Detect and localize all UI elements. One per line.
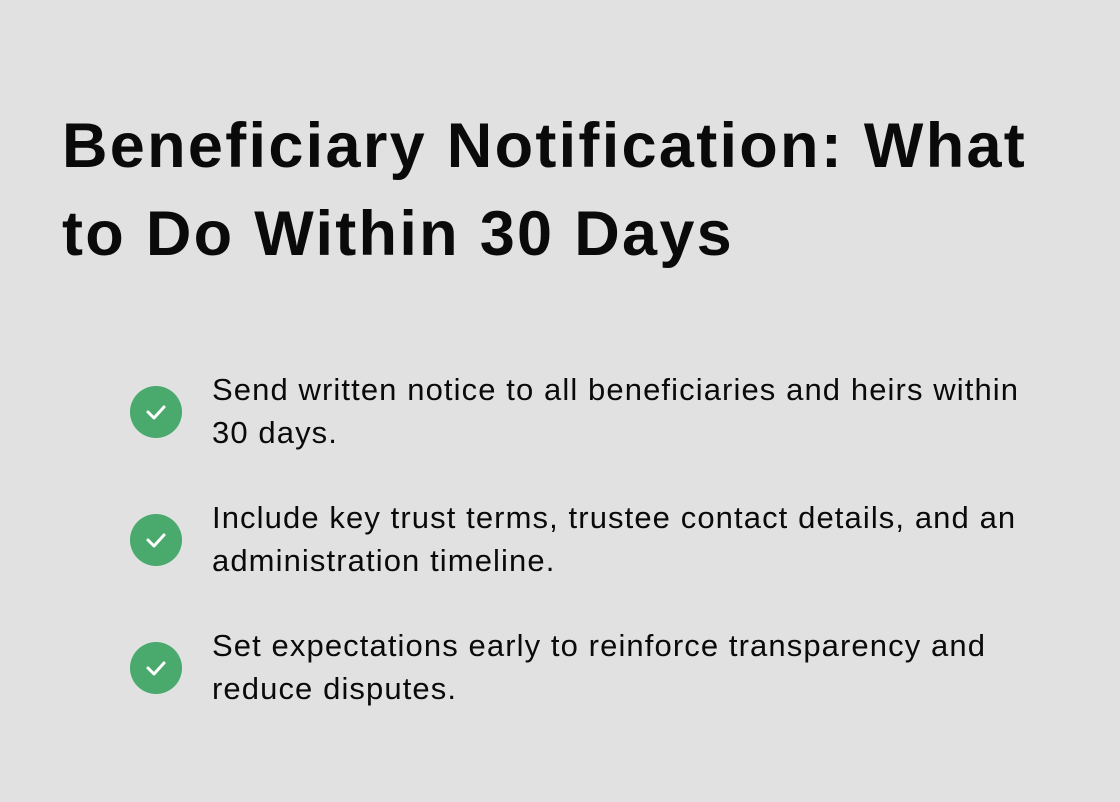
- title: Beneficiary Notification: What: [62, 111, 1027, 181]
- title: to Do Within 30 Days: [62, 199, 734, 269]
- icon: check 2: [130, 514, 182, 566]
- icon: check 3: [130, 642, 182, 694]
- text 3: reduce disputes.: [212, 671, 457, 706]
- icon: check 1: [130, 386, 182, 438]
- text 2: Include key trust terms, trustee contact details, and an: [212, 500, 1016, 535]
- item 1: [130, 372, 1019, 450]
- text 2: [212, 500, 1016, 578]
- item 3: [130, 628, 986, 706]
- text 1: 30 days.: [212, 415, 338, 450]
- text 1: [212, 372, 1019, 450]
- text 1: Send written notice to all beneficiaries and heirs within: [212, 372, 1019, 407]
- text 3: [212, 628, 986, 706]
- title: [62, 111, 1027, 269]
- text 3: Set expectations early to reinforce transparency and: [212, 628, 986, 663]
- item 2: [130, 500, 1016, 578]
- text 2: administration timeline.: [212, 543, 555, 578]
